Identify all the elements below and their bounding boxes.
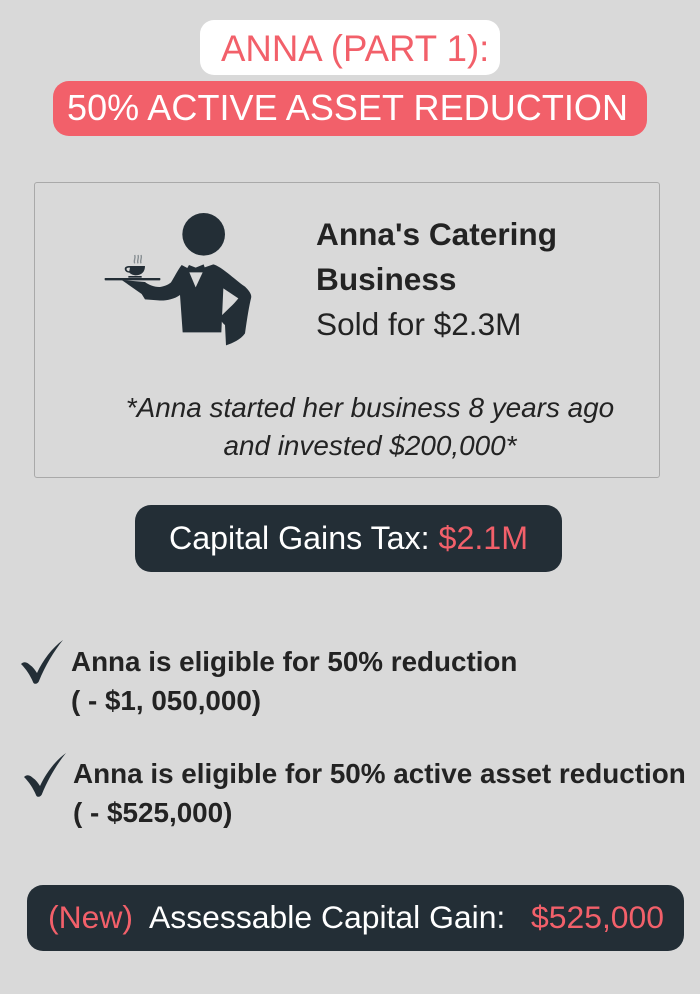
title line 1: ANNA (PART 1): <box>221 28 489 69</box>
reduction item 2: ( - $525,000) <box>73 797 232 828</box>
business heading and price: Sold for $2.3M <box>316 306 521 342</box>
capital gains tax banner <box>135 505 562 572</box>
reduction item 2 <box>73 758 686 828</box>
reduction item 1: Anna is eligible for 50% reduction <box>71 646 517 677</box>
capital gains tax banner: Capital Gains Tax: $2.1M <box>169 520 528 556</box>
title line 1 <box>200 20 500 75</box>
gain amount: $525,000 <box>531 899 664 935</box>
business heading and price <box>316 216 557 342</box>
new label: (New) <box>48 899 133 935</box>
title line 2: 50% ACTIVE ASSET REDUCTION <box>67 87 628 128</box>
icon: waiter holding tray with cup <box>104 213 252 346</box>
reduction item 1 <box>71 646 517 716</box>
note on investment: *Anna started her business 8 years ago <box>126 392 614 423</box>
assessable capital gain banner <box>27 885 684 951</box>
business heading and price: Anna's Catering <box>316 216 557 252</box>
icon: check mark 2 <box>24 753 66 797</box>
note on investment <box>126 392 614 461</box>
business heading and price: Business <box>316 261 456 297</box>
icon: check mark 1 <box>21 640 63 684</box>
panel: Anna's catering business <box>34 182 660 478</box>
reduction item 2: Anna is eligible for 50% active asset reduction <box>73 758 686 789</box>
gain label: Assessable Capital Gain: <box>149 899 505 935</box>
reduction item 1: ( - $1, 050,000) <box>71 685 261 716</box>
note on investment: and invested $200,000* <box>223 430 517 461</box>
